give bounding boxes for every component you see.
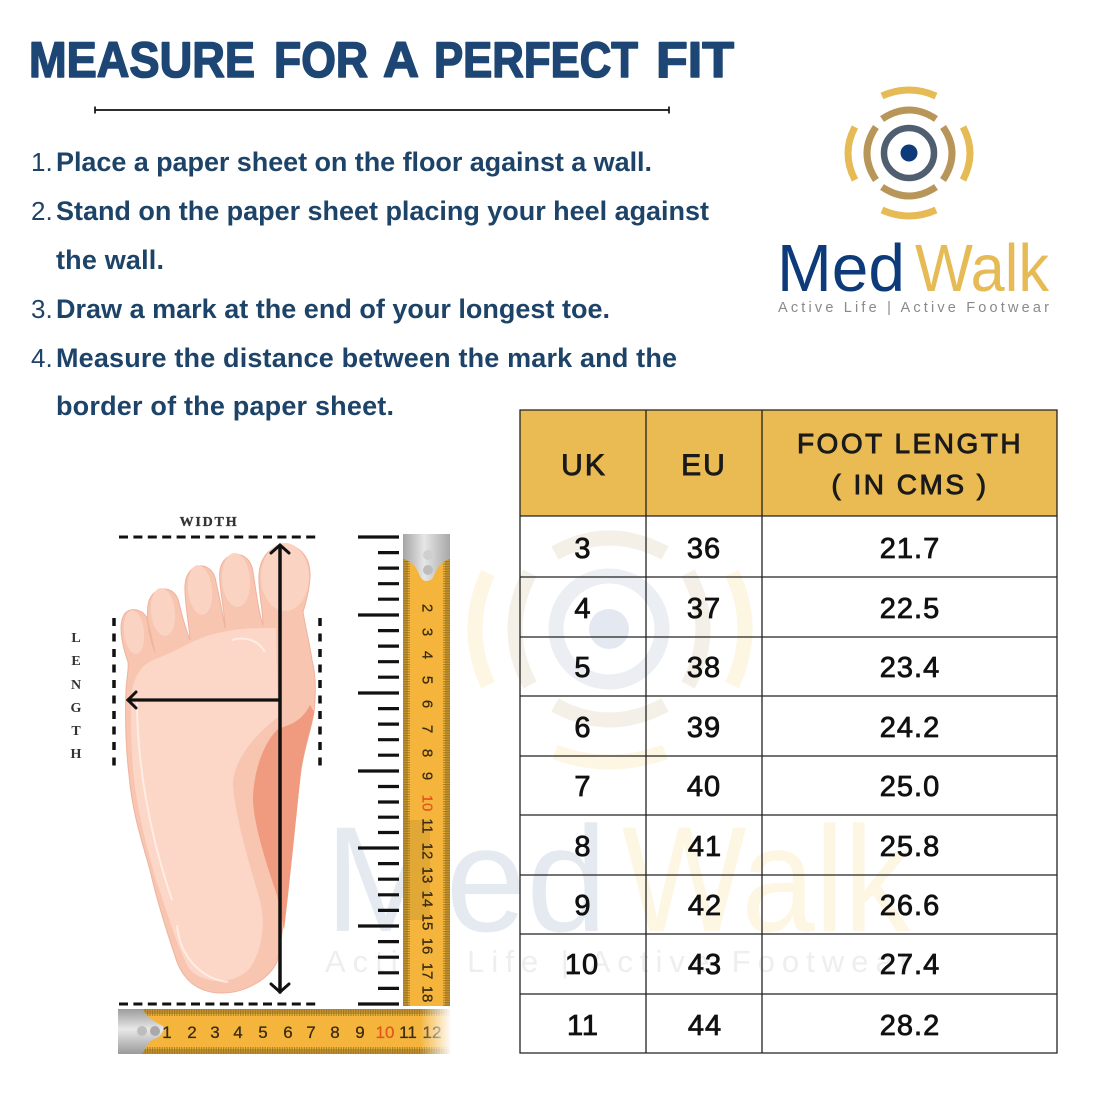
watermark logo: Walk xyxy=(622,795,911,963)
title: FOR xyxy=(274,32,368,88)
vertical tape measure: 13 xyxy=(418,867,436,883)
table rows: 26.6 xyxy=(880,890,940,922)
table rows: 4 xyxy=(574,593,592,625)
vertical tape measure: 17 xyxy=(418,963,436,979)
table rows: 41 xyxy=(688,831,722,863)
vertical tape measure: 18 xyxy=(418,986,436,1002)
table rows: 25.8 xyxy=(880,831,940,863)
title: FIT xyxy=(656,32,734,88)
horizontal tape measure: 5 xyxy=(258,1023,268,1042)
vertical tape measure: 12 xyxy=(418,843,436,859)
horizontal tape measure: 1 xyxy=(162,1023,172,1042)
vertical tape measure: 11 xyxy=(418,818,436,834)
horizontal tape measure: 2 xyxy=(187,1023,197,1042)
vertical tape measure: 14 xyxy=(418,891,436,907)
watermark logo: Med xyxy=(325,795,607,963)
instructions: 4. xyxy=(31,343,53,373)
table rows: 37 xyxy=(687,593,721,625)
table rows: 27.4 xyxy=(880,949,940,981)
instructions: border of the paper sheet. xyxy=(56,391,394,421)
watermark logo: Active Life | Active Footwear xyxy=(325,944,910,979)
table rows: 7 xyxy=(574,771,592,803)
ruler ticks xyxy=(358,537,399,1004)
vertical tape measure: 16 xyxy=(418,938,436,954)
label: length xyxy=(71,631,82,762)
title: A xyxy=(383,32,419,88)
header labels: EU xyxy=(681,449,727,482)
table rows: 24.2 xyxy=(880,712,940,744)
highlights xyxy=(137,638,265,982)
table rows: 3 xyxy=(574,533,592,565)
title xyxy=(29,32,734,88)
table rows: 44 xyxy=(688,1010,722,1042)
logo wordmark: Med xyxy=(777,231,905,306)
instructions: Measure the distance between the mark and the xyxy=(56,343,677,373)
logo icon xyxy=(848,90,970,216)
horizontal tape measure: 12 xyxy=(423,1023,441,1042)
table rows: 25.0 xyxy=(880,771,940,803)
table header xyxy=(520,410,1057,516)
vertical tape measure: 8 xyxy=(418,749,436,757)
sole xyxy=(131,628,278,981)
vertical tape measure: 6 xyxy=(418,700,436,708)
table rows: 40 xyxy=(687,771,721,803)
logo tagline: Active Life | Active Footwear xyxy=(778,300,1049,316)
label: length: E xyxy=(71,654,81,669)
instructions: 1. xyxy=(31,147,53,177)
vertical tape measure: 2 xyxy=(418,604,436,612)
vertical tape measure: 5 xyxy=(418,676,436,684)
foot measurement diagram xyxy=(71,515,452,1056)
horizontal tape measure: 8 xyxy=(330,1023,340,1042)
vertical tape measure: 4 xyxy=(418,651,436,659)
table rows: 8 xyxy=(574,831,592,863)
table rows: 39 xyxy=(687,712,721,744)
header labels: ( IN CMS ) xyxy=(831,469,989,500)
vertical tape measure: 15 xyxy=(418,914,436,930)
instructions: the wall. xyxy=(56,245,164,275)
dashed guides xyxy=(114,537,320,1004)
foot outline xyxy=(121,545,315,993)
label: length: T xyxy=(71,724,81,739)
horizontal tape measure: 9 xyxy=(355,1023,365,1042)
label: length: H xyxy=(71,747,82,762)
logo: MedWalk xyxy=(777,90,1049,316)
horizontal tape measure: 7 xyxy=(306,1023,316,1042)
horizontal tape measure: 11 xyxy=(399,1023,417,1042)
divider rule xyxy=(95,106,669,114)
label: length: L xyxy=(71,631,81,646)
title: PERFECT xyxy=(434,32,638,88)
table rows: 22.5 xyxy=(880,593,940,625)
table grid xyxy=(520,410,1057,1053)
table rows: 9 xyxy=(574,890,592,922)
instructions: Place a paper sheet on the floor against a wall. xyxy=(56,147,652,177)
table rows: 5 xyxy=(574,652,592,684)
vertical tape measure: 3 xyxy=(418,628,436,636)
label: length: N xyxy=(71,678,81,693)
instructions: 3. xyxy=(31,294,53,324)
vertical tape measure: 7 xyxy=(418,725,436,733)
horizontal tape measure: 4 xyxy=(233,1023,243,1042)
horizontal tape measure xyxy=(118,1006,452,1056)
table rows: 10 xyxy=(565,949,599,981)
table rows: 11 xyxy=(567,1010,599,1042)
header labels: UK xyxy=(561,449,607,482)
toe pads xyxy=(122,543,309,655)
table rows: 36 xyxy=(687,533,721,565)
table rows: 28.2 xyxy=(880,1010,940,1042)
vertical tape measure: 9 xyxy=(418,772,436,780)
foot illustration xyxy=(121,543,315,993)
header labels xyxy=(561,428,1023,500)
logo: MedWalk: Walk xyxy=(915,231,1049,306)
vertical tape measure: 10 xyxy=(418,795,436,811)
instructions: 2. xyxy=(31,196,53,226)
table rows: 23.4 xyxy=(880,652,940,684)
label: width: WIDTH xyxy=(180,515,238,530)
table rows: 42 xyxy=(688,890,722,922)
vertical tape measure xyxy=(403,534,450,1006)
title: MEASURE xyxy=(29,32,255,88)
header labels: FOOT LENGTH xyxy=(797,428,1023,459)
table rows: 43 xyxy=(688,949,722,981)
instructions xyxy=(31,147,709,421)
horizontal tape measure: 6 xyxy=(283,1023,293,1042)
arch shadow xyxy=(253,705,314,930)
instructions: Stand on the paper sheet placing your heel against xyxy=(56,196,709,226)
table rows xyxy=(565,533,940,1042)
size chart table xyxy=(520,410,1057,1053)
instructions: Draw a mark at the end of your longest toe. xyxy=(56,294,610,324)
watermark logo xyxy=(325,495,911,979)
arrows xyxy=(128,545,289,992)
label: length: G xyxy=(71,701,82,716)
table rows: 6 xyxy=(574,712,592,744)
horizontal tape measure: 10 xyxy=(376,1023,394,1042)
table rows: 38 xyxy=(687,652,721,684)
horizontal tape measure: 3 xyxy=(210,1023,220,1042)
table rows: 21.7 xyxy=(880,533,940,565)
